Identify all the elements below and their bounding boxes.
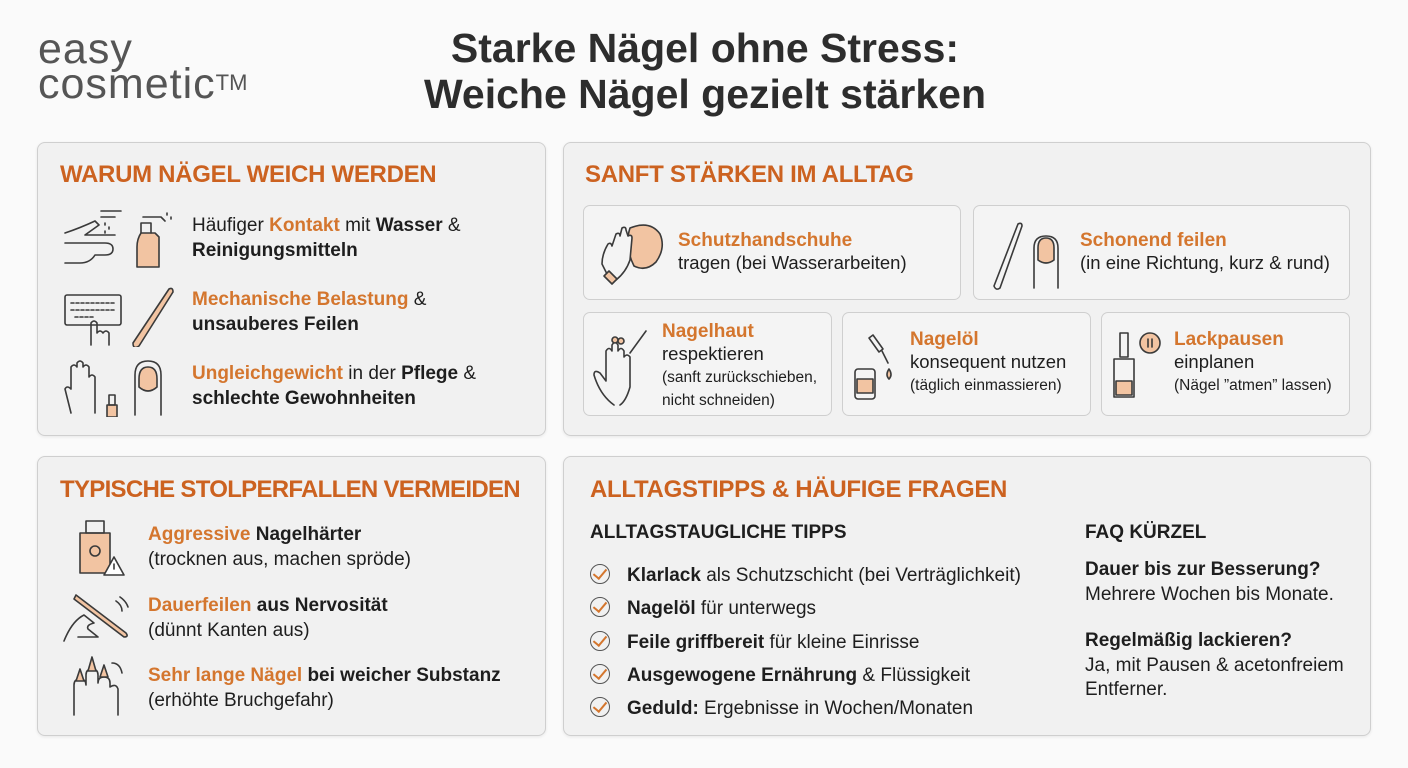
text: item 2: Mechanische Belastung & [192, 289, 426, 310]
checklist: Nagelöl für unterwegs [627, 598, 816, 619]
title [424, 25, 986, 117]
text: Nagelhaut [662, 321, 754, 342]
icon: keyboard and file [64, 288, 174, 347]
panel: sanft stärken im alltag [563, 142, 1371, 436]
text: (Nägel ”atmen” lassen) [1174, 377, 1332, 394]
text: item 2: unsauberes Feilen [192, 314, 359, 334]
faq 1: Mehrere Wochen bis Monate. [1085, 584, 1334, 604]
icon: long nails [73, 656, 123, 716]
text: item 1 [192, 215, 461, 260]
heading: ALLTAGSTIPPS & HÄUFIGE FRAGEN [590, 476, 1007, 503]
icon: polish pause [1113, 332, 1161, 398]
title: Weiche Nägel gezielt stärken [424, 71, 986, 117]
logo: cosmeticTM [38, 60, 247, 108]
panel: warum nägel weich werden [37, 142, 546, 436]
icon: glove sponge [601, 224, 664, 285]
faq heading: FAQ KÜRZEL [1085, 522, 1206, 543]
text: einplanen [1174, 351, 1254, 372]
text: respektieren [662, 343, 764, 364]
title: Starke Nägel ohne Stress: [451, 25, 959, 71]
icon: hand filing [63, 594, 129, 642]
text: item 3: Ungleichgewicht in der Pflege & [192, 363, 476, 384]
faq 1: Dauer bis zur Besserung? [1085, 559, 1320, 580]
card: lackpausen [1101, 312, 1350, 416]
text [678, 230, 907, 273]
faq 2: Entferner. [1085, 679, 1167, 700]
text: Nagelöl [910, 329, 979, 350]
heading: SANFT STÄRKEN IM ALLTAG [585, 161, 914, 188]
card: schonend feilen [973, 205, 1350, 300]
icon: dropper bottle [854, 334, 892, 400]
faq 2: Regelmäßig lackieren? [1085, 630, 1292, 651]
text: Schonend feilen [1080, 230, 1227, 251]
heading: TYPISCHE STOLPERFALLEN VERMEIDEN [60, 476, 520, 503]
icon: washing hands and spray [64, 210, 172, 268]
panel: typische stolperfallen [37, 456, 546, 736]
faq 2 [1085, 630, 1344, 700]
text: item 2 [148, 595, 388, 640]
text [1080, 230, 1330, 273]
text: item 1: (trocknen aus, machen spröde) [148, 548, 411, 570]
text: item 3: (erhöhte Bruchgefahr) [148, 690, 334, 710]
subheading: ALLTAGSTAUGLICHE TIPPS [590, 522, 846, 543]
text: (sanft zurückschieben, [662, 369, 817, 386]
card: nagelöl [842, 312, 1091, 416]
text: item 2: Dauerfeilen aus Nervosität [148, 595, 388, 616]
text: item 3: schlechte Gewohnheiten [192, 388, 416, 408]
text: item 2: (dünnt Kanten aus) [148, 620, 310, 640]
faq 2: Ja, mit Pausen & acetonfreiem [1085, 654, 1344, 676]
icon: file and finger [993, 222, 1059, 290]
icon: hand with pusher [593, 330, 647, 406]
checklist: Geduld: Ergebnisse in Wochen/Monaten [627, 698, 973, 719]
faq 1 [1085, 559, 1334, 604]
faq [1085, 521, 1344, 700]
text: item 1: Reinigungsmitteln [192, 240, 358, 260]
text: item 3: Sehr lange Nägel bei weicher Substanz [148, 665, 501, 686]
checklist: Feile griffbereit für kleine Einrisse [627, 632, 919, 653]
logo: easy [38, 25, 133, 73]
card: schutzhandschuhe [583, 205, 961, 300]
text: Schutzhandschuhe [678, 230, 852, 251]
checklist [590, 564, 1021, 719]
logo [38, 25, 247, 108]
text: (täglich einmassieren) [910, 377, 1062, 394]
text: nicht schneiden) [662, 392, 775, 409]
card: nagelhaut [583, 312, 832, 416]
checklist: Klarlack als Schutzschicht (bei Verträglichkeit) [627, 565, 1021, 586]
tips list [590, 522, 1021, 719]
text: item 3 [192, 363, 476, 408]
text: item 3 [148, 665, 501, 710]
text: item 2 [192, 289, 426, 334]
text [1174, 329, 1332, 394]
heading: WARUM NÄGEL WEICH WERDEN [60, 161, 436, 188]
text: konsequent nutzen [910, 351, 1066, 372]
text [662, 321, 817, 409]
text: item 1 [148, 524, 411, 570]
text: item 1: Aggressive Nagelhärter [148, 524, 361, 545]
icon: bottle warning [79, 520, 125, 576]
icon: hand, polish, nail [64, 360, 162, 417]
text: item 1: Häufiger Kontakt mit Wasser & [192, 215, 461, 236]
text: tragen (bei Wasserarbeiten) [678, 252, 907, 273]
panel: alltagstipps & häufige fragen [563, 456, 1371, 736]
text: Lackpausen [1174, 329, 1284, 350]
checklist: Ausgewogene Ernährung & Flüssigkeit [627, 665, 970, 686]
text [910, 329, 1066, 394]
text: (in eine Richtung, kurz & rund) [1080, 252, 1330, 273]
